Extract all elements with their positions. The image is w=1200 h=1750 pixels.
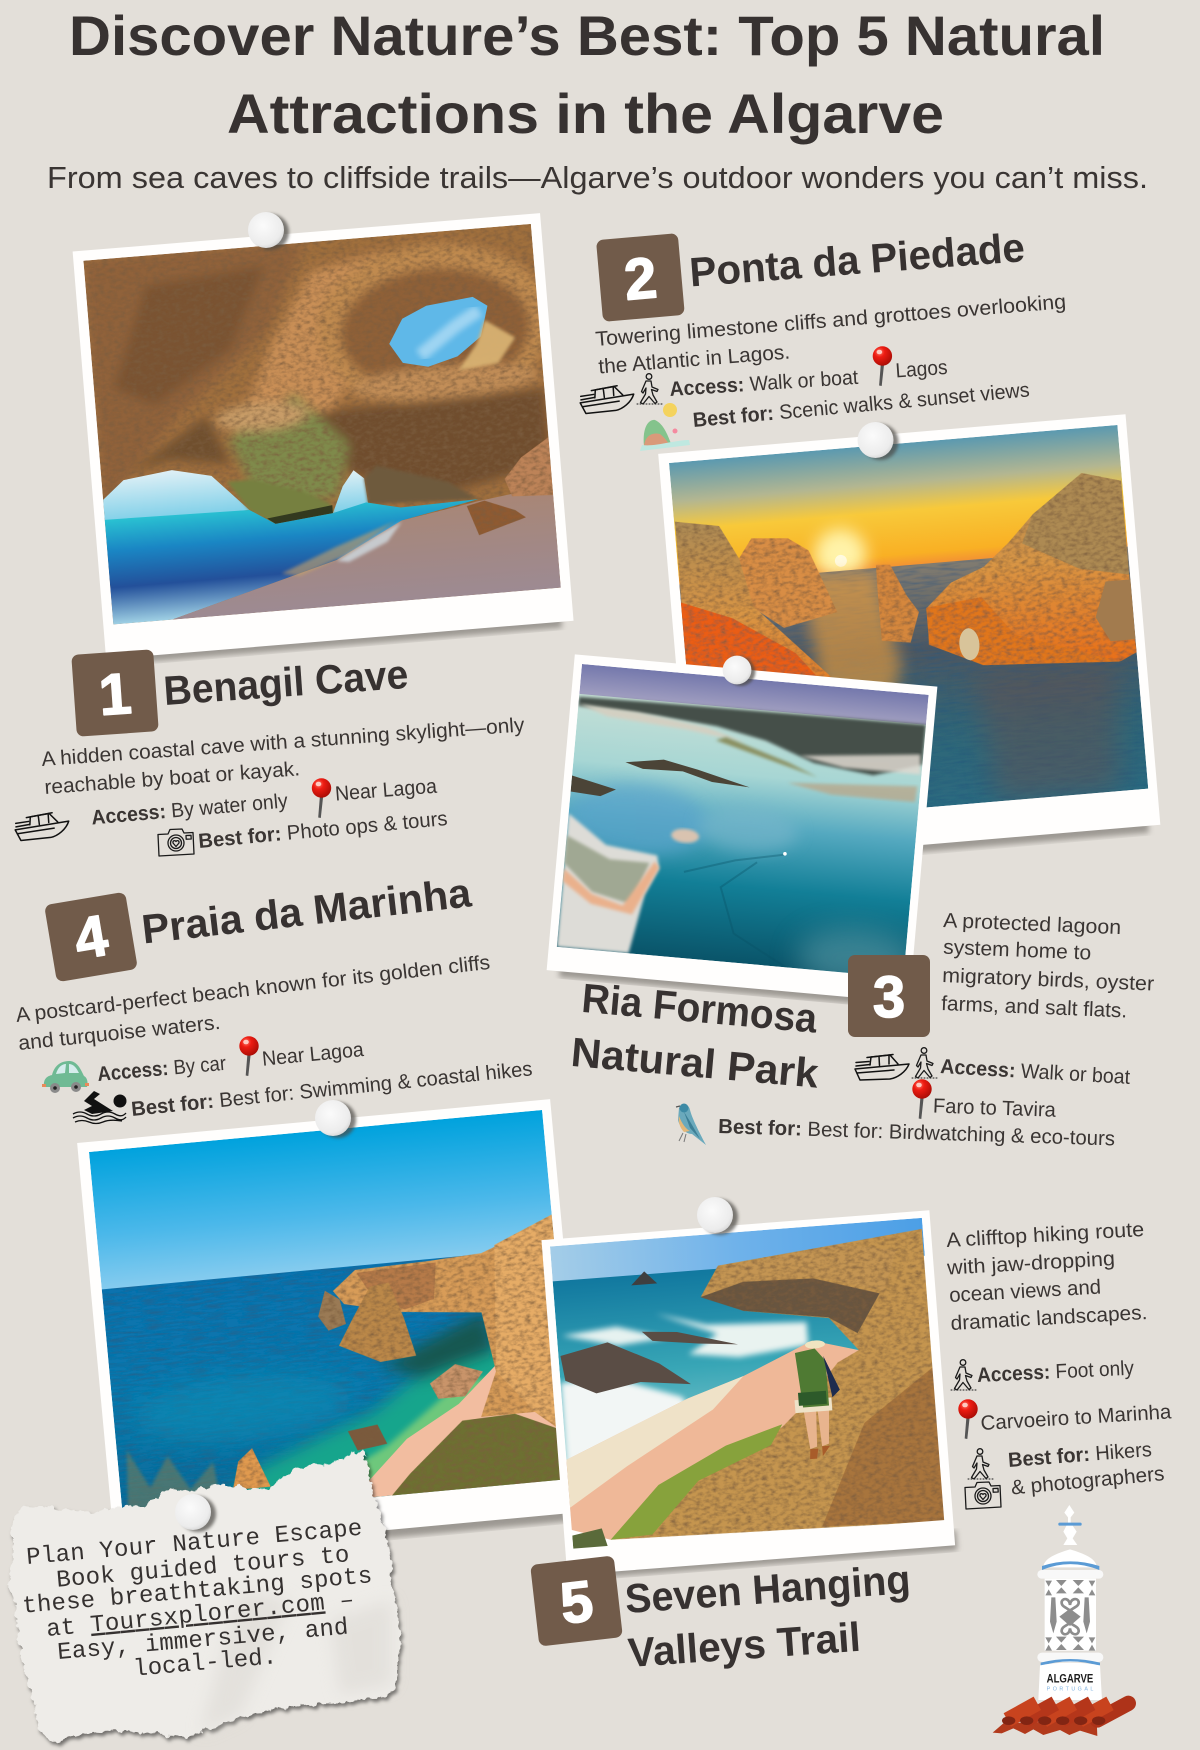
icon: pin on note: [175, 1494, 216, 1532]
polaroid frame: [658, 414, 1160, 864]
icon: pin on cave photo: [248, 212, 289, 250]
surf: [560, 1312, 812, 1460]
text: Marinha best for: Best for: Best for: Swimming & coastal hikes: [130, 1057, 533, 1121]
text: Trail best for: [1007, 1438, 1165, 1499]
polaroid shadow: [703, 807, 1149, 870]
panel: photo Ponta da Piedade: [658, 414, 1161, 871]
text block: Benagil description: reachable by boat or kayak.: [44, 757, 301, 799]
heading: Benagil Cave: Benagil Cave: [162, 651, 410, 714]
icon: map pin: [873, 346, 892, 386]
shoreline rocks: [430, 1364, 483, 1399]
heading: Praia da Marinha: Praia da Marinha: [139, 869, 475, 953]
text: Trail access: Access: Foot only: [977, 1357, 1135, 1387]
text: Ria Formosa best for: Best for: Best for: Birdwatching & eco-tours: [718, 1115, 1115, 1150]
icon: boat: [579, 385, 635, 414]
text block: Trail description: dramatic landscapes.: [950, 1301, 1148, 1335]
text: Trail best for: Best for: Hikers: [1007, 1438, 1153, 1472]
callout: torn paper note: these breathtaking spots: [21, 1563, 373, 1621]
vegetation: [603, 1424, 790, 1540]
icon: camera: [158, 829, 194, 856]
text block: Ria Formosa description: A protected lagoon: [943, 909, 1122, 939]
arch openings: [103, 470, 250, 522]
polaroid frame: [541, 1210, 955, 1575]
text: Ponta location: Lagos: [895, 356, 948, 382]
text block: Ria Formosa description: migratory birds, oyster: [942, 964, 1155, 996]
badge 2: [596, 233, 685, 322]
bushes: [392, 1414, 560, 1496]
offshore rocks: [560, 1342, 691, 1394]
panel: photo Ria Formosa: [546, 654, 941, 1009]
badge 5: 5: [557, 1568, 596, 1637]
callout: torn paper note: local-led.: [132, 1644, 278, 1684]
callout: torn paper note: Book guided tours to: [55, 1542, 351, 1595]
polaroid frame: [73, 213, 574, 659]
text block: Ponta description: the Atlantic in Lagos.: [598, 340, 791, 378]
polaroid shadow: [572, 1530, 957, 1580]
icon: boat: [14, 812, 70, 841]
sea stack: [338, 1283, 416, 1362]
text block: Trail description: [945, 1218, 1148, 1335]
text: Ria Formosa location: Faro to Tavira: [933, 1095, 1057, 1122]
sea: [105, 489, 486, 624]
text block: Trail description: ocean views and: [949, 1276, 1102, 1307]
grasses: [125, 1450, 219, 1508]
text: Benagil location: Near Lagoa: [334, 775, 438, 806]
sea stack: [876, 564, 919, 643]
icon: map pin: [958, 1399, 978, 1439]
cliffs: [332, 1214, 556, 1427]
illustration: beach and cliffs: [89, 1110, 578, 1535]
badge 4: 4: [70, 903, 112, 972]
icon: pin on trail photo: [697, 1197, 738, 1235]
icon: walker: [912, 1048, 937, 1078]
icon: walker: [968, 1449, 993, 1479]
text block: Benagil description: A hidden coastal cave with a stunning skylight—only: [41, 713, 526, 771]
heading: Seven Hanging Valleys Trail: Seven Hanging: [623, 1556, 912, 1622]
heading: Ria Formosa Natural Park: Ria Formosa: [580, 975, 820, 1042]
icon: Algarve chimney logo: PORTUGAL: [1047, 1686, 1093, 1692]
badge 3: 3: [873, 965, 905, 1030]
illustration: clifftop trail: [546, 1218, 945, 1551]
illustration: sea cave: [83, 223, 575, 624]
polaroid shadow: [559, 963, 899, 1007]
cave pillar base: [227, 479, 335, 522]
icon: walker: [951, 1360, 976, 1390]
icon: Algarve chimney logo: [993, 1505, 1128, 1736]
text block: Ria Formosa description: system home to: [943, 936, 1092, 965]
callout: torn paper note: [9, 1449, 402, 1742]
icon: map pin: [239, 1036, 259, 1076]
text block: Marinha description: A postcard-perfect beach known for its golden cliffs: [15, 951, 491, 1027]
text: Benagil best for: Best for: Photo ops & tours: [197, 807, 448, 853]
foreground rock: [233, 1448, 271, 1489]
cliff: [611, 1228, 932, 1540]
polaroid frame: [77, 1099, 588, 1555]
text block: Benagil description: [41, 713, 526, 799]
icon: pin on Ponta photo: [858, 422, 898, 460]
right cliff: [927, 473, 1137, 666]
heading: Seven Hanging Valleys Trail: [623, 1556, 912, 1676]
badge 5: [530, 1556, 623, 1646]
text: Marinha location: Near Lagoa: [261, 1038, 365, 1071]
title: Attractions in the Algarve: [227, 82, 944, 145]
subtitle: From sea caves to cliffside trails—Algarve’s outdoor wonders you can’t miss.: [47, 160, 1148, 195]
icon: car: [42, 1061, 89, 1093]
text block: Marinha description: [15, 951, 491, 1055]
icon: pin on Marinha photo: [315, 1100, 356, 1138]
sea: [679, 547, 1148, 827]
title: Discover Nature’s Best: Top 5 Natural: [69, 4, 1105, 67]
heading: Ria Formosa Natural Park: Natural Park: [569, 1029, 821, 1097]
beach: [566, 1340, 859, 1540]
icon: swimmer: [73, 1091, 126, 1124]
beach: [164, 485, 561, 620]
text block: Ria Formosa description: farms, and salt flats.: [941, 992, 1128, 1022]
heading: Ria Formosa Natural Park: [569, 975, 821, 1097]
illustration: lagoon: [555, 664, 941, 995]
skylight: [389, 296, 488, 367]
heading: Ponta da Piedade: Ponta da Piedade: [688, 224, 1026, 295]
text block: Ponta description: [595, 290, 1067, 378]
illustration: sunset cliffs: [669, 425, 1148, 827]
text: Ria Formosa access: Access: Walk or boat: [940, 1055, 1131, 1089]
boulders: [462, 437, 556, 536]
badge 4: [44, 892, 138, 982]
turquoise shallows: [228, 1344, 520, 1498]
badge 1: 1: [97, 661, 133, 728]
icon: map pin: [912, 1079, 932, 1119]
text block: Ria Formosa description: [941, 909, 1155, 1022]
heading: Seven Hanging Valleys Trail: Valleys Trail: [626, 1614, 862, 1676]
badge 3: [848, 955, 930, 1037]
text block: Ponta description: Towering limestone cliffs and grottoes overlooking: [595, 290, 1067, 351]
left cliffs: [739, 538, 837, 628]
text block: Marinha description: and turquoise waters.: [17, 1011, 221, 1055]
far shore: [574, 694, 926, 780]
text block: Trail description: A clifftop hiking route: [946, 1218, 1145, 1252]
icon: boat: [855, 1054, 909, 1080]
icon: pin on lagoon photo: [723, 656, 755, 686]
panel: photo Praia da Marinha: [77, 1099, 589, 1563]
sand spit: [671, 828, 700, 844]
polaroid shadow: [117, 606, 562, 664]
text: Ponta access: Access: Walk or boat: [669, 366, 859, 401]
badge 2: 2: [622, 245, 659, 313]
text: Ponta best for: Best for: Scenic walks & sunset views: [692, 378, 1031, 432]
beach: [369, 1366, 560, 1497]
text: Trail best for: & photographers: [1010, 1462, 1165, 1499]
icon: map pin: [312, 778, 331, 818]
wake: [684, 854, 786, 968]
text: Benagil access: Access: By water only: [90, 789, 289, 829]
panel: photo Seven Hanging Valleys Trail: [541, 1210, 957, 1580]
polaroid frame: [547, 654, 937, 1002]
icon: camera: [965, 1482, 1001, 1509]
note text: Plan Your Nature Escape: [25, 1516, 363, 1572]
hiker: [794, 1340, 840, 1460]
lower tile row: [993, 1720, 1097, 1736]
icon: island: [640, 403, 690, 451]
text block: Trail description: with jaw-dropping: [945, 1247, 1116, 1280]
islands: [626, 760, 750, 788]
callout: torn paper note: at Toursxplorer.com –: [45, 1587, 355, 1644]
text: Trail location: Carvoeiro to Marinha: [980, 1400, 1173, 1435]
callout: torn paper note: Easy, immersive, and: [56, 1615, 350, 1667]
badge 1: [71, 649, 159, 737]
icon: walker: [637, 374, 662, 404]
icon: Algarve chimney logo: ALGARVE: [1047, 1672, 1093, 1686]
polaroid shadow: [127, 1497, 577, 1562]
icon: bird: [676, 1104, 706, 1145]
text: Marinha access: Access: By car: [96, 1052, 227, 1086]
title: [69, 4, 1105, 145]
panel: photo Benagil Cave: [73, 213, 578, 665]
torn paper: [9, 1449, 402, 1742]
